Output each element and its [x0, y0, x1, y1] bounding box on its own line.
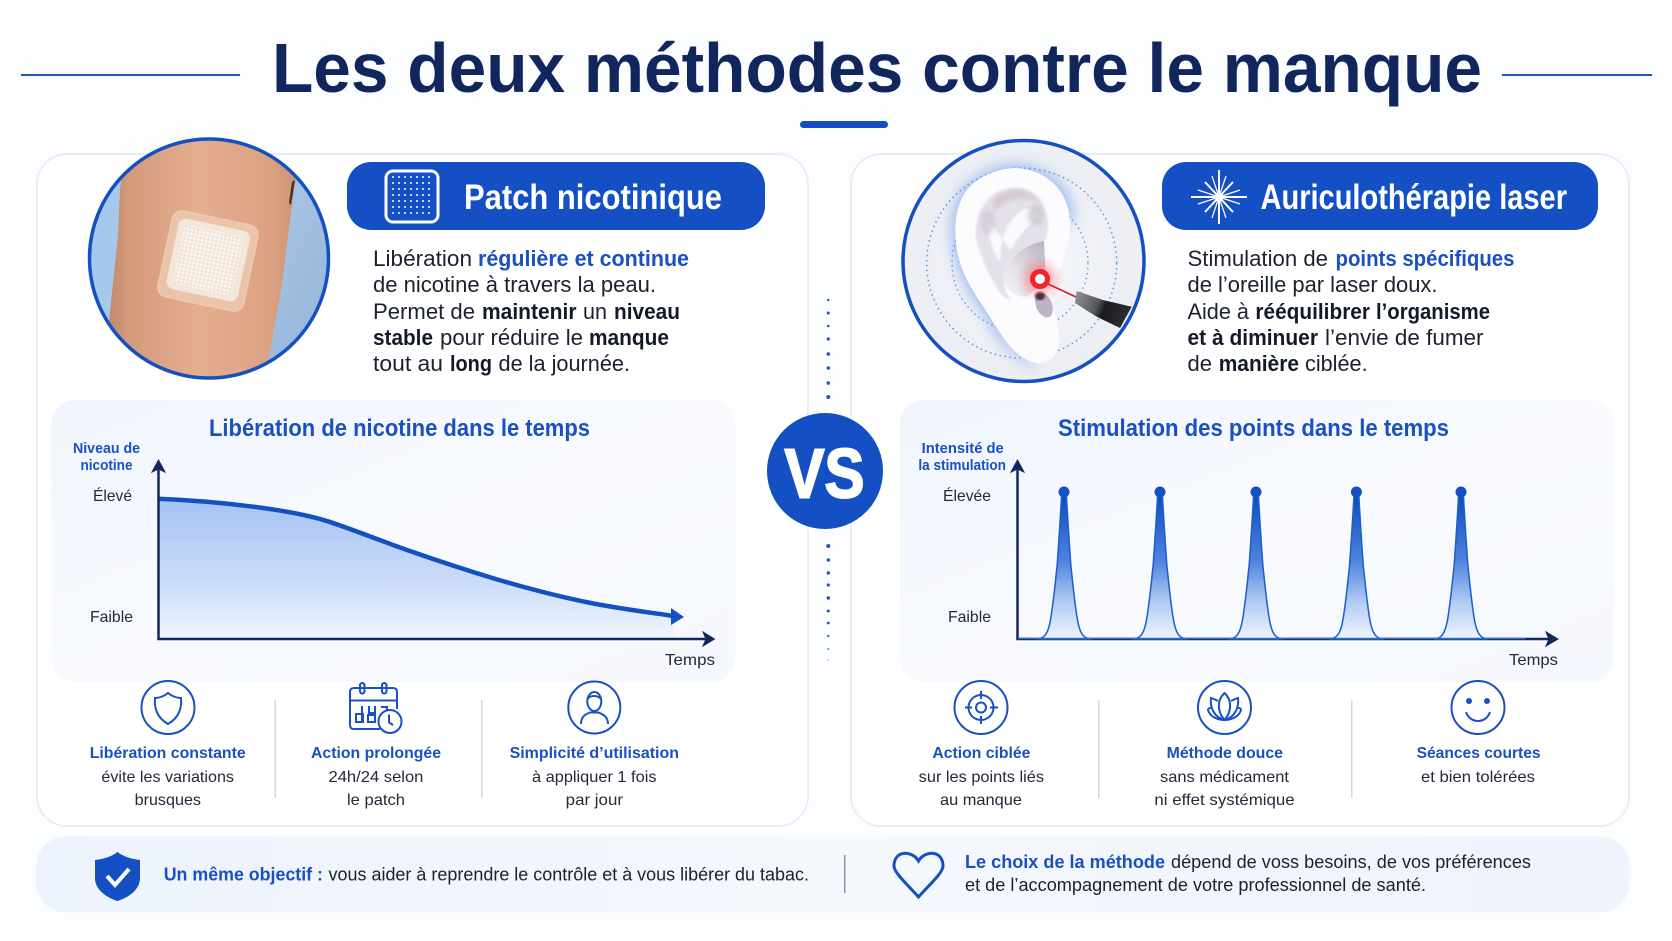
icon: laser star: [1191, 170, 1247, 224]
title: Les deux méthodes contre le manque: [272, 29, 1482, 107]
feature: action prolongée: le patch: [347, 792, 405, 809]
description: patch: pour réduire le: [440, 325, 583, 350]
chart: libération de nicotine: Faible: [90, 609, 133, 626]
feature: action ciblée: Action ciblée: [932, 745, 1030, 762]
chart: libération de nicotine: [52, 400, 736, 682]
header: auriculothérapie laser: Auriculothérapie laser: [1260, 178, 1567, 217]
VS badge: VS: [784, 434, 864, 512]
description: patch: Permet de: [373, 299, 475, 324]
callout: choix de la méthode: dépend de voss besoins, de vos préférences: [1171, 851, 1531, 872]
feature: action ciblée: sur les points liés: [919, 769, 1044, 786]
chart: libération de nicotine: Libération de nicotine dans le temps: [209, 415, 590, 442]
description: patch: manque: [589, 325, 669, 350]
icon: target: [954, 681, 1008, 734]
chart: libération de nicotine: nicotine: [80, 458, 132, 474]
chart: stimulation des points: Intensité de: [922, 441, 1004, 457]
icon: lotus: [1198, 681, 1251, 734]
feature: séances courtes: Séances courtes: [1417, 745, 1541, 762]
chart: stimulation des points: [900, 400, 1614, 682]
bottom banner: [36, 836, 1630, 912]
description: patch: tout au: [373, 351, 443, 376]
feature: libération constante: évite les variations: [101, 769, 234, 786]
icon: patch: [386, 171, 438, 222]
description: patch: maintenir: [482, 299, 577, 324]
description: auriculothérapie: rééquilibrer: [1255, 299, 1370, 324]
feature: simplicité d'utilisation: par jour: [566, 792, 624, 809]
icon: user: [568, 682, 620, 734]
description: patch: long: [450, 351, 492, 376]
callout: objectif: vous aider à reprendre le contrôle et à vous libérer du tabac.: [328, 864, 809, 885]
chart: libération de nicotine: Niveau de: [73, 441, 140, 457]
description: patch: de la journée.: [498, 351, 630, 376]
feature: méthode douce: ni effet systémique: [1154, 792, 1295, 809]
callout: choix de la méthode: et de l’accompagnement de votre professionnel de santé.: [965, 874, 1426, 895]
feature: action ciblée: au manque: [940, 792, 1022, 809]
description: auriculothérapie: et à diminuer: [1188, 325, 1318, 350]
chart: stimulation des points: Temps: [1509, 652, 1558, 669]
chart: stimulation des points: Faible: [948, 609, 991, 626]
description: auriculothérapie: Aide à: [1188, 299, 1250, 324]
description: patch: Libération: [373, 246, 472, 271]
description: auriculothérapie: de l’oreille par laser doux.: [1188, 272, 1438, 297]
feature: action prolongée: 24h/24 selon: [328, 769, 423, 786]
chart: stimulation des points: Élevée: [943, 486, 991, 505]
feature: méthode douce: sans médicament: [1160, 769, 1290, 786]
chart: libération de nicotine: Élevé: [93, 486, 132, 505]
header: auriculothérapie laser: [1162, 162, 1598, 230]
callout: choix de la méthode: Le choix de la méthode: [965, 851, 1165, 872]
photo: ear with laser: [900, 138, 1150, 388]
description: auriculothérapie: l’envie de fumer: [1325, 325, 1484, 350]
feature: simplicité d'utilisation: [510, 682, 679, 809]
description: auriculothérapie: ciblée.: [1305, 351, 1368, 376]
VS badge: [767, 413, 883, 529]
description: patch: régulière et continue: [478, 246, 689, 271]
icon: heart: [894, 853, 943, 897]
description: patch: stable: [373, 325, 433, 350]
feature: libération constante: Libération constante: [90, 745, 246, 762]
separator: dotted line: [826, 299, 830, 661]
panel: patch nicotinique: [37, 135, 808, 826]
header: patch nicotinique: Patch nicotinique: [464, 178, 722, 217]
feature: méthode douce: Méthode douce: [1167, 745, 1283, 762]
icon: smile: [1452, 681, 1504, 734]
title: [21, 29, 1652, 128]
chart: stimulation des points: Stimulation des points dans le temps: [1058, 415, 1449, 442]
description: auriculothérapie: de: [1188, 351, 1212, 376]
feature: action ciblée: [919, 681, 1044, 809]
chart: stimulation des points: la stimulation: [918, 458, 1006, 474]
description: patch: [373, 246, 689, 376]
description: auriculothérapie: points spécifiques: [1336, 246, 1514, 271]
icon: shield check: [95, 852, 140, 901]
icon: calendar: [350, 683, 402, 733]
feature: séances courtes: et bien tolérées: [1421, 769, 1535, 786]
feature: simplicité d'utilisation: Simplicité d’utilisation: [510, 745, 679, 762]
feature: libération constante: [90, 681, 246, 809]
callout: choix de la méthode: [965, 851, 1531, 895]
description: patch: de nicotine à travers la peau.: [373, 272, 656, 297]
description: auriculothérapie: [1188, 246, 1514, 376]
photo: patch on arm: [85, 135, 335, 385]
description: auriculothérapie: l’organisme: [1376, 299, 1490, 324]
feature: séances courtes: [1417, 681, 1541, 786]
panel: auriculothérapie laser: [851, 138, 1629, 826]
chart: libération de nicotine: Temps: [665, 652, 715, 669]
feature: action prolongée: [311, 683, 441, 809]
header: patch nicotinique: [347, 162, 765, 230]
description: auriculothérapie: manière: [1219, 351, 1299, 376]
feature: simplicité d'utilisation: à appliquer 1 fois: [532, 769, 656, 786]
description: auriculothérapie: Stimulation de: [1188, 246, 1328, 271]
description: patch: un: [583, 299, 607, 324]
feature: méthode douce: [1154, 681, 1295, 809]
icon: shield: [142, 681, 194, 734]
callout: objectif: Un même objectif :: [164, 864, 323, 885]
feature: action prolongée: Action prolongée: [311, 745, 441, 762]
feature: libération constante: brusques: [135, 792, 201, 809]
description: patch: niveau: [614, 299, 680, 324]
